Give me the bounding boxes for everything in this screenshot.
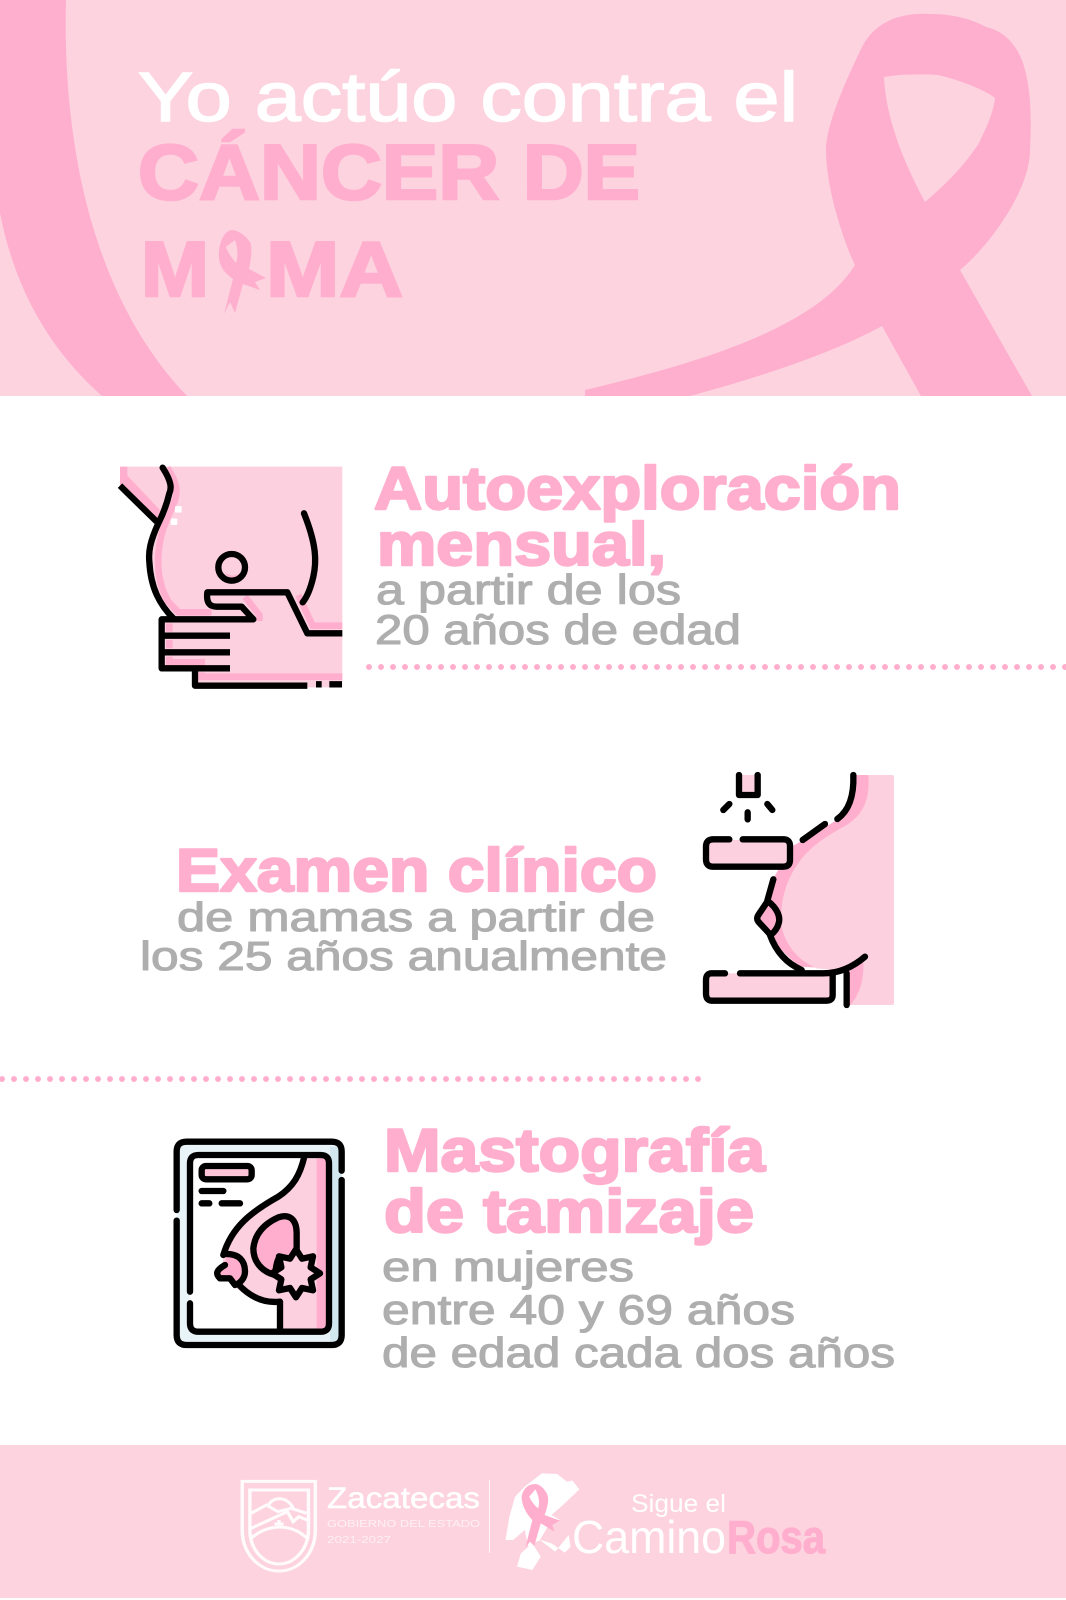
text block: Autoexploración mensual: Autoexploración [374, 455, 901, 522]
text block: Mastografía de tamizaje [382, 1117, 895, 1376]
title line: MAMA with ribbon as letter A: M [141, 225, 209, 313]
logo text: Sigue el: Sigue el [631, 1490, 726, 1518]
text block: Mastografía de tamizaje: de edad cada dos años [382, 1329, 895, 1376]
icon: mammogram x-ray [177, 1142, 342, 1345]
text block: Mastografía de tamizaje: de tamizaje [384, 1178, 754, 1245]
panel: header [0, 0, 1066, 396]
logo: Zacatecas shield [242, 1481, 315, 1571]
logo text: period: 2021-2027 [327, 1535, 392, 1546]
icon: clinical breast exam [706, 775, 894, 1005]
panel: footer [0, 1445, 1066, 1598]
logo text: Gobierno del Estado: GOBIERNO DEL ESTADO [327, 1519, 480, 1530]
text block: Examen clínico [140, 837, 667, 979]
text block: Examen clínico: los 25 años anualmente [140, 933, 667, 979]
text block: Mastografía de tamizaje: entre 40 y 69 años [382, 1286, 795, 1333]
title line: Yo actúo contra el: Yo actúo contra el [138, 58, 798, 136]
logo text: Camino: Camino [572, 1511, 726, 1563]
title line: MAMA with ribbon as letter A [141, 225, 403, 314]
text block: Examen clínico: de mamas a partir de [177, 894, 655, 940]
logo text: Zacatecas: Zacatecas [327, 1482, 480, 1515]
text block: Autoexploración mensual [374, 455, 901, 653]
decorative ribbon band left [0, 0, 187, 396]
text block: Autoexploración mensual: mensual, [377, 511, 666, 578]
icon: small ribbon [219, 230, 266, 314]
logo: Zacatecas map with ribbon [506, 1473, 579, 1570]
text block: Mastografía de tamizaje: en mujeres [382, 1243, 634, 1290]
icon: breast self-exam [120, 467, 342, 687]
text block: Autoexploración mensual: 20 años de edad [375, 606, 741, 653]
text block: Mastografía de tamizaje: Mastografía [384, 1117, 766, 1184]
title line: CÁNCER DE: CÁNCER DE [138, 128, 640, 216]
text block: Examen clínico: Examen clínico [176, 837, 657, 904]
large ribbon right [585, 14, 1032, 396]
title line: MAMA with ribbon as letter A: MA [266, 225, 403, 313]
text block: Autoexploración mensual: a partir de los [376, 566, 681, 613]
logo text: Rosa: Rosa [727, 1511, 825, 1563]
